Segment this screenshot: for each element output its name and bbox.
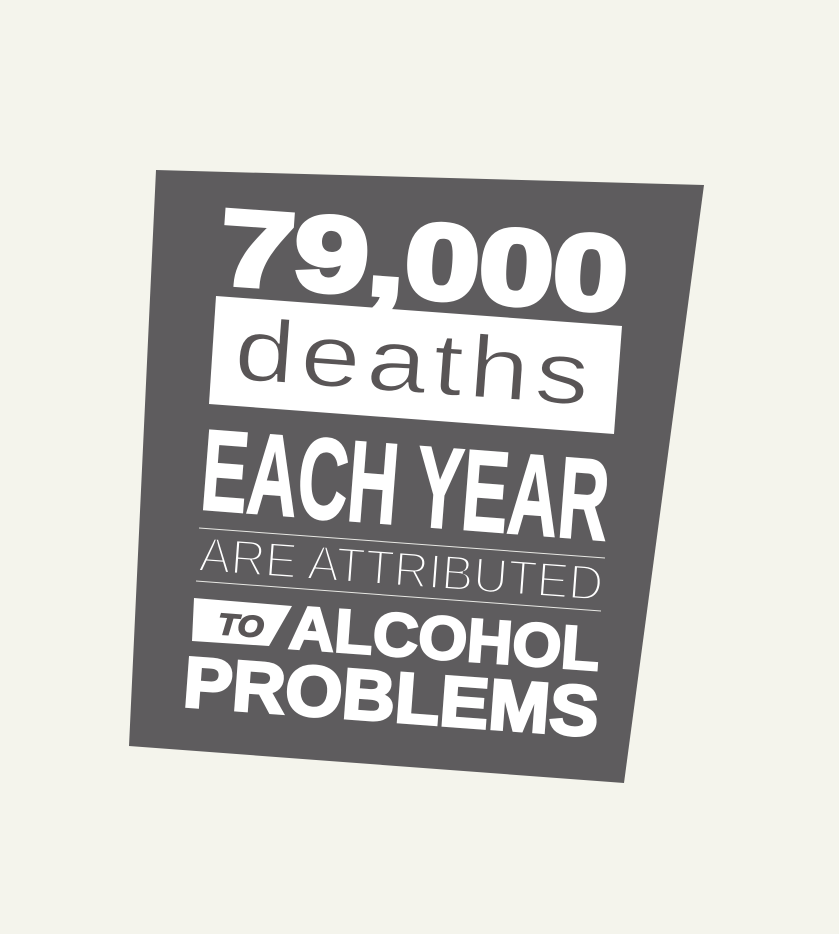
tag: to bbox=[192, 598, 292, 646]
tag: to: TO bbox=[216, 608, 265, 644]
heading: problems: PROBLEMS bbox=[181, 643, 601, 752]
text block: are attributed, between two rules: ARE ATTRIBUTED bbox=[197, 528, 605, 612]
heading: 79,000: 79,000 bbox=[216, 188, 632, 334]
banner: deaths: deaths bbox=[232, 299, 593, 424]
panel: dark tilted background bbox=[129, 170, 704, 783]
heading: alcohol: ALCOHOL bbox=[287, 593, 602, 683]
